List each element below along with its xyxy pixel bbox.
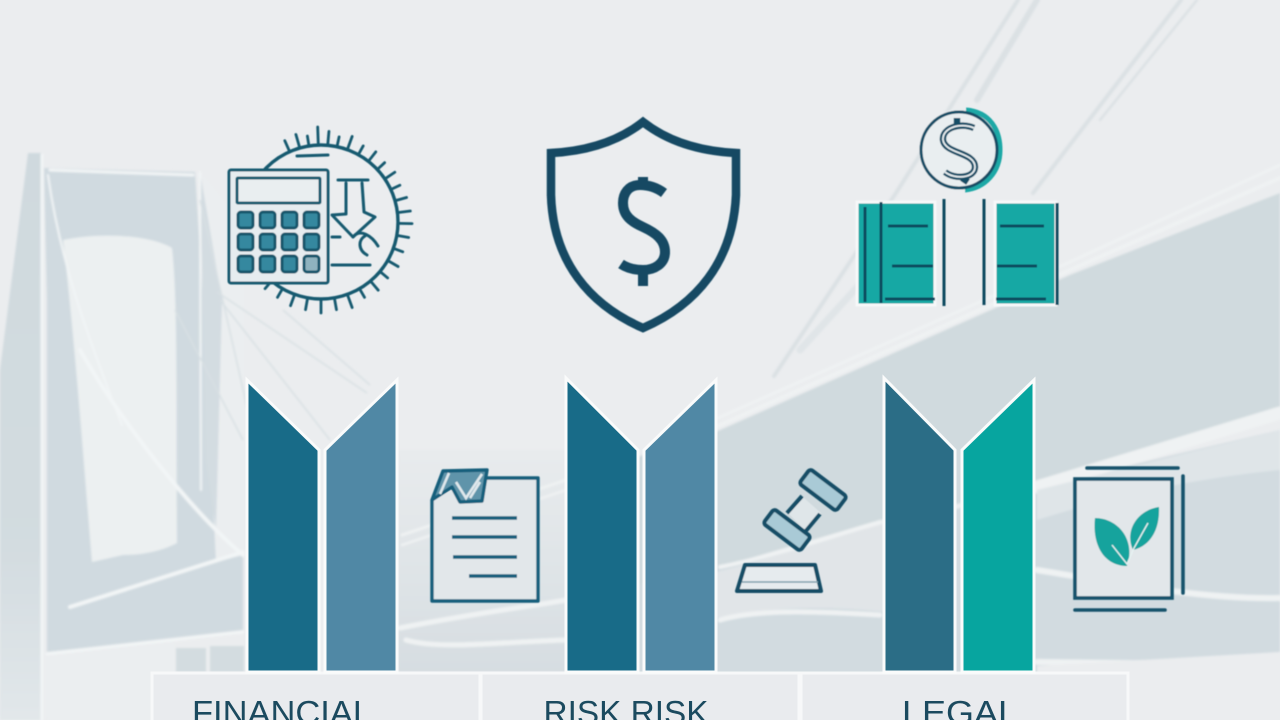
- gavel lower head: [763, 509, 811, 551]
- bridge: light stripes: [400, 165, 1280, 664]
- right book: [984, 199, 1057, 305]
- coin with dollar: [921, 110, 1000, 190]
- bridge: pale gap behind document icon: [398, 450, 566, 672]
- icon: coin and books: [857, 110, 1057, 306]
- frame: [1075, 468, 1183, 610]
- icon: framed leaf: [1075, 468, 1183, 610]
- icon: document with check: [432, 470, 538, 601]
- left book: [857, 199, 944, 306]
- chevron bars: legal: [884, 378, 1034, 672]
- bridge: upper right cables: [774, 0, 1197, 376]
- icon: calculator with coin: [229, 127, 412, 313]
- panel: legal: [801, 673, 1128, 720]
- chevron bars: financial: [247, 380, 397, 672]
- bridge: pale gap below gavel stripe: [716, 524, 884, 618]
- bridge: pale upper patch right of band: [1037, 430, 1280, 520]
- coin circle with ticks: [244, 127, 412, 313]
- gavel handle: [789, 498, 821, 531]
- label panels row: [152, 673, 1128, 720]
- bridge: main deck band, right side: [566, 193, 1280, 610]
- icon: gavel: [737, 469, 847, 591]
- bridge: white cable strokes: [42, 155, 243, 720]
- bridge: lower ground: [566, 430, 1280, 720]
- bridge: left tower: [0, 153, 244, 720]
- chevron bars: risk: [566, 378, 716, 672]
- panel: risk: [481, 673, 799, 720]
- calculator keys: [238, 212, 319, 272]
- gavel base: [737, 565, 821, 591]
- bridge: pale lower right patch: [1037, 652, 1280, 720]
- bridge: thin grey cables: [175, 200, 370, 440]
- panel: financial: [152, 673, 480, 720]
- down arrow inside coin: [297, 155, 378, 265]
- calculator body: [229, 170, 328, 283]
- check badge: [432, 470, 487, 502]
- leaves: [1095, 518, 1129, 566]
- icon: shield with dollar: [551, 122, 736, 328]
- gavel upper head: [799, 469, 847, 511]
